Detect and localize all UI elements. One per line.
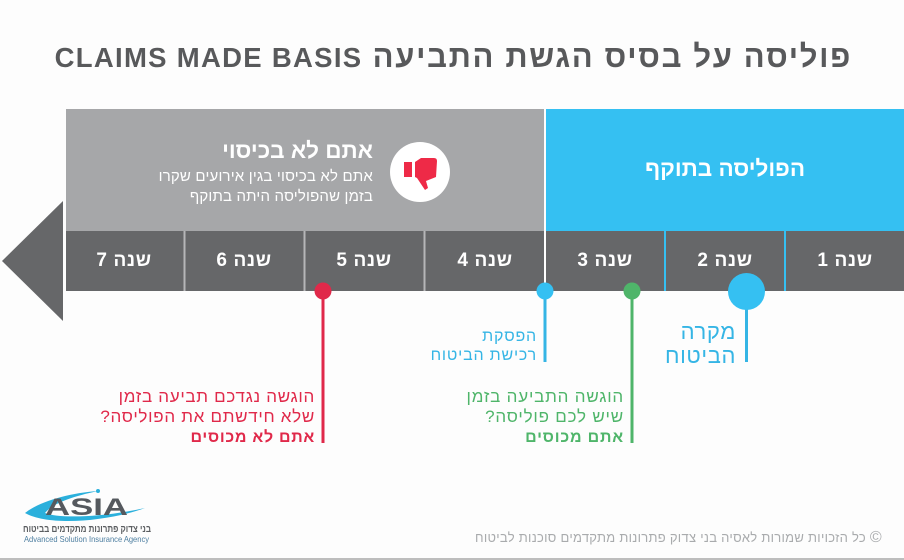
year 1: שנה 1 (817, 250, 873, 271)
marker: insured event (728, 273, 765, 362)
year 6: שנה 6 (216, 250, 272, 271)
timeline bar (66, 231, 904, 291)
label: claim without policy: אתם לא מכוסים (191, 429, 315, 446)
logo: ASIA: ASIA (45, 494, 128, 521)
label: claim with policy (467, 387, 624, 446)
label: claim without policy (100, 387, 315, 446)
panel: policy in force (546, 109, 904, 231)
label: insured event: הביטוח (665, 342, 736, 368)
label: insured event (665, 319, 736, 368)
year 5: שנה 5 (336, 250, 392, 271)
arrow: timeline direction (2, 201, 63, 321)
text: not covered explanation: אתם לא בכיסוי בגין אירועים שקרו (159, 168, 373, 185)
heading: policy in force: הפוליסה בתוקף (645, 156, 805, 181)
label: claim with policy: אתם מכוסים (525, 429, 624, 446)
label: claim with policy: שיש לכם פוליסה? (485, 407, 624, 426)
label: insured event: מקרה (681, 319, 736, 344)
label: purchase stopped: הפסקת (482, 328, 537, 345)
text: not covered explanation (159, 168, 373, 204)
year 4: שנה 4 (457, 250, 513, 271)
year separators (184, 231, 786, 291)
marker: purchase stopped (536, 282, 554, 362)
year 7: שנה 7 (96, 250, 152, 271)
label: claim with policy: הוגשה התביעה בזמן (467, 387, 624, 406)
icon: thumbs down (390, 142, 450, 202)
year 2: שנה 2 (697, 250, 753, 271)
heading: not covered: אתם לא בכיסוי (222, 138, 373, 163)
label: purchase stopped: רכישת הביטוח (431, 347, 537, 364)
panel: not covered (66, 109, 544, 231)
label: purchase stopped (431, 328, 537, 364)
marker: red claim without policy (314, 282, 332, 443)
logo: ASIA (23, 489, 151, 544)
year 3: שנה 3 (577, 250, 633, 271)
marker: green claim with policy (624, 282, 640, 443)
text: not covered explanation: בזמן שהפוליסה היתה בתוקף (190, 188, 373, 204)
title: פוליסה על בסיס הגשת התביעה CLAIMS MADE BASIS (55, 39, 852, 74)
label: claim without policy: שלא חידשתם את הפוליסה? (100, 407, 315, 426)
copyright notice: © כל הזכויות שמורות לאסיה בני צדוק פתרונות מתקדמים סוכנות לביטוח (475, 529, 882, 546)
label: claim without policy: הוגשה נגדכם תביעה בזמן (119, 387, 315, 406)
